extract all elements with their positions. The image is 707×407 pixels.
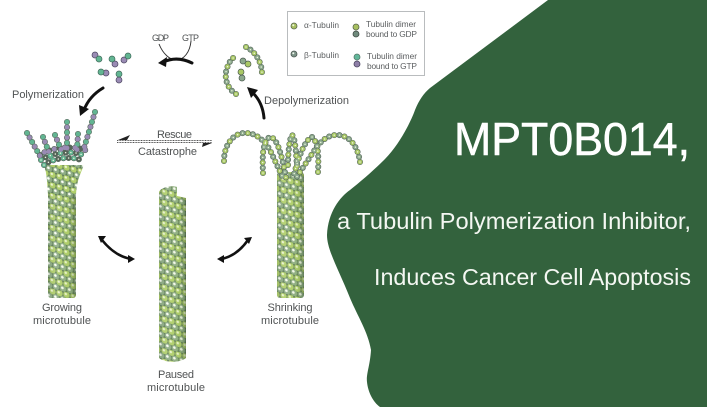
GTP label: GTP <box>182 33 199 43</box>
icon: beta tubulin bead <box>291 51 297 57</box>
shrinking tube body <box>277 172 304 298</box>
paused tube body <box>159 186 186 362</box>
subtitle line 1: a Tubulin Polymerization Inhibitor, <box>337 208 691 234</box>
arrow: depolymerization <box>247 87 264 118</box>
paused label: microtubule <box>147 382 205 394</box>
icon: GDP dimer <box>353 24 359 37</box>
growing label: Growing <box>42 302 82 314</box>
GTP dimer label: bound to GTP <box>367 61 417 71</box>
label: Depolymerization: Depolymerization <box>264 95 349 107</box>
GDP label: GDP <box>152 33 169 43</box>
shrinking label: Shrinking <box>268 302 312 314</box>
growing GTP crown <box>27 112 95 165</box>
icon: alpha tubulin bead <box>291 23 297 29</box>
legend <box>288 12 424 76</box>
depolymerized fragments <box>226 47 262 94</box>
rescue catastrophe double line <box>117 140 212 142</box>
label: Polymerization: Polymerization <box>12 89 84 101</box>
icon: GTP dimer <box>354 54 360 67</box>
catastrophe label: Catastrophe <box>138 146 197 158</box>
rescue label: Rescue <box>157 129 192 141</box>
shrinking curled protofilaments <box>224 133 360 178</box>
arrow: growing to paused <box>98 236 135 263</box>
title: MPT0B014: MPT0B014, <box>454 113 690 165</box>
arrow: polymerization <box>79 88 103 116</box>
alpha tubulin label: α-Tubulin <box>304 20 339 30</box>
arrow: exchange <box>158 57 192 67</box>
GTP dimer label: Tubulin dimer <box>367 51 417 61</box>
thin exchange arc <box>159 41 191 60</box>
free GTP dimers <box>92 52 131 83</box>
beta tubulin label: β-Tubulin <box>304 50 339 60</box>
growing flared tip <box>44 165 84 195</box>
rescue catastrophe <box>117 129 212 158</box>
shrinking microtubule <box>224 133 360 327</box>
arrow: catastrophe <box>202 143 212 147</box>
growing microtubule <box>27 112 95 327</box>
GDP dimer label: bound to GDP <box>366 29 417 39</box>
background blob <box>327 0 707 407</box>
arrow: rescue <box>118 135 130 140</box>
arrow: paused to shrinking <box>217 237 252 263</box>
growing tube body <box>48 185 76 298</box>
GDP GTP exchange <box>152 33 199 67</box>
growing label: microtubule <box>33 315 91 327</box>
paused label: Paused <box>158 369 194 381</box>
subtitle line 2: Induces Cancer Cell Apoptosis <box>374 264 691 290</box>
shrinking label: microtubule <box>261 315 319 327</box>
paused microtubule <box>147 186 205 394</box>
GDP dimer label: Tubulin dimer <box>366 19 416 29</box>
